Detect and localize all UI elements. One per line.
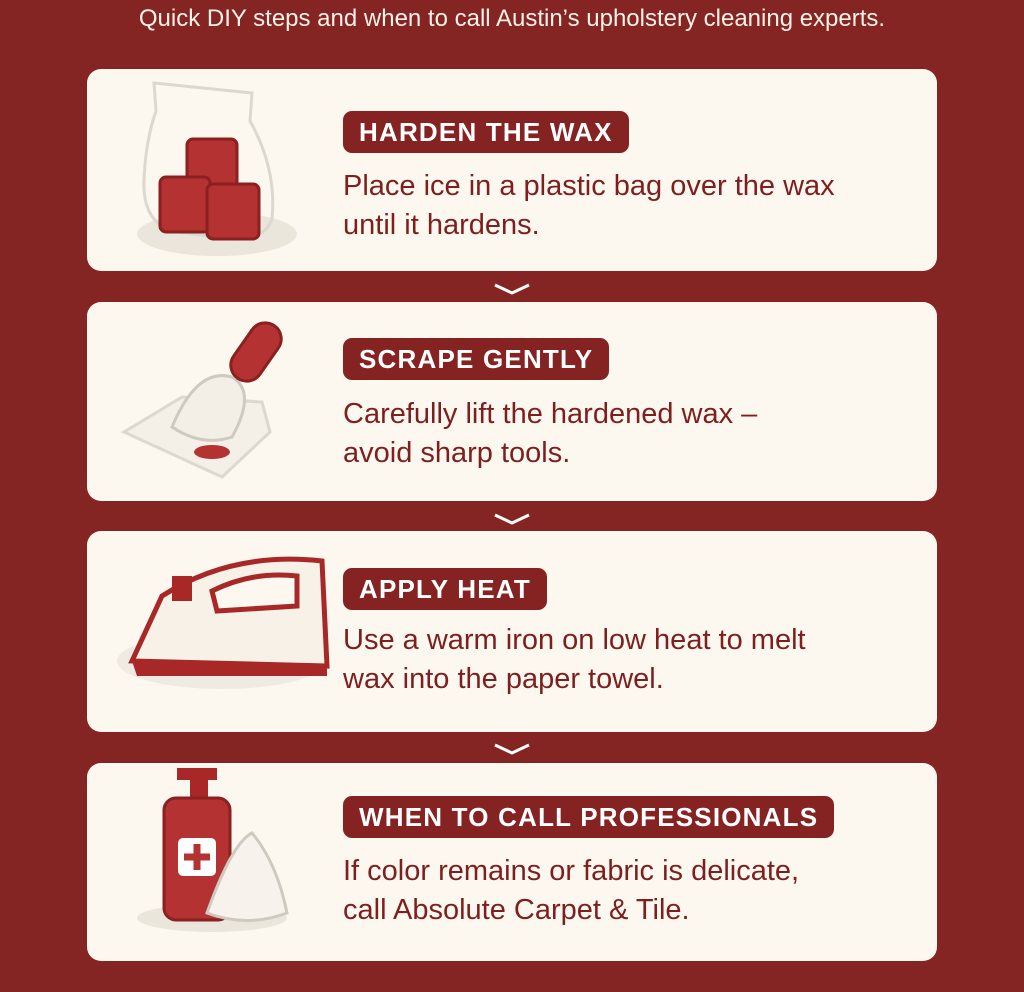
text [343, 398, 758, 469]
text: Use a warm iron on low heat to melt [343, 624, 806, 656]
panel: when to call professionals [87, 763, 937, 961]
arrow [494, 514, 530, 525]
text: avoid sharp tools. [343, 437, 570, 469]
text: Place ice in a plastic bag over the wax [343, 170, 835, 202]
text: Carefully lift the hardened wax – [343, 398, 757, 430]
text: wax into the paper towel. [343, 663, 664, 695]
icon: ice bag [137, 82, 297, 256]
text: call Absolute Carpet & Tile. [343, 894, 690, 926]
panel: harden the wax [87, 69, 937, 271]
icon: scraper [121, 321, 283, 479]
text [343, 855, 799, 926]
panel: scrape gently [87, 302, 937, 501]
label: scrape gently [343, 338, 609, 380]
label: when to call professionals: WHEN TO CALL PROFESSIONALS [359, 802, 818, 832]
label: apply heat [343, 568, 547, 610]
subtitle: Quick DIY steps and when to call Austin’s upholstery cleaning experts. [139, 5, 885, 32]
label: apply heat: APPLY HEAT [359, 574, 531, 604]
label: scrape gently: SCRAPE GENTLY [359, 344, 593, 374]
panel: apply heat [87, 531, 937, 732]
icon: iron [117, 556, 330, 689]
text: If color remains or fabric is delicate, [343, 855, 799, 887]
text: until it hardens. [343, 209, 540, 241]
label: harden the wax [343, 111, 629, 153]
text [343, 624, 806, 695]
text [343, 170, 835, 241]
label: when to call professionals [343, 796, 834, 838]
label: harden the wax: HARDEN THE WAX [359, 117, 613, 147]
arrow [494, 744, 530, 755]
arrow [494, 284, 530, 295]
icon: cleaner bottle and cloth [137, 768, 289, 932]
